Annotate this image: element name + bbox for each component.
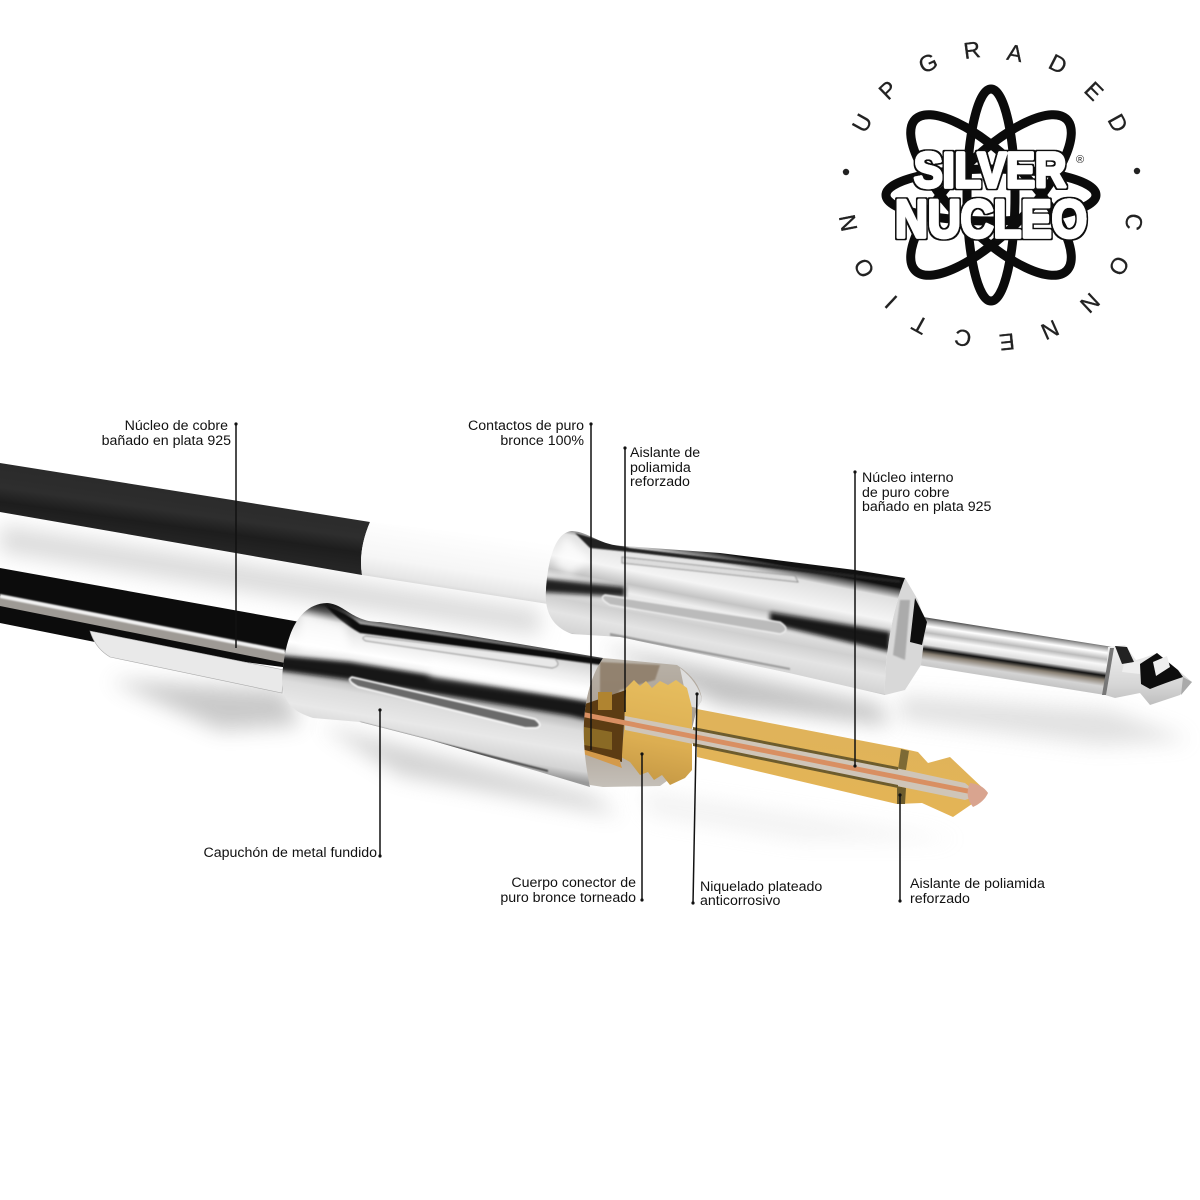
callout: Aislante de poliamida (bottom): reforzado — [910, 891, 970, 907]
ring lettering: G — [914, 47, 942, 79]
collar — [885, 578, 926, 695]
callout: Aislante de poliamida (top): Aislante de — [630, 445, 700, 461]
callout: Núcleo de cobre: bañado en plata 925 — [102, 433, 231, 449]
shaft — [918, 617, 1113, 695]
callout: Núcleo interno: de puro cobre — [862, 485, 950, 501]
callout: Núcleo interno: Núcleo interno — [862, 470, 954, 486]
callout: Aislante de poliamida (bottom) — [898, 793, 1045, 907]
callout: Contactos de puro bronce: Contactos de puro — [468, 418, 584, 434]
ring lettering — [834, 36, 1148, 356]
logo: Silver Nucleo: ® — [1076, 154, 1084, 166]
ring lettering: E — [998, 328, 1016, 356]
ring lettering: N — [1037, 315, 1063, 345]
slots — [363, 636, 558, 668]
ring lettering: A — [1005, 39, 1025, 67]
callout: Aislante de poliamida (top): poliamida — [630, 460, 691, 476]
ring lettering: E — [1079, 76, 1109, 106]
callout: Capuchón de metal fundido — [203, 708, 382, 861]
callout: Aislante de poliamida (top) — [623, 445, 700, 712]
gold plug cross-section — [578, 658, 988, 817]
plug tip — [1102, 645, 1192, 705]
atom orbits — [886, 89, 1096, 301]
white cable sleeve — [361, 522, 560, 604]
callout: Contactos de puro bronce: bronce 100% — [500, 433, 584, 449]
ring lettering: N — [1075, 288, 1105, 318]
lower metal connector — [275, 603, 610, 787]
gold body — [621, 680, 692, 785]
callout: Aislante de poliamida (top): reforzado — [630, 474, 690, 490]
callout: Cuerpo conector: Cuerpo conector de — [511, 875, 636, 891]
center conductor — [625, 716, 693, 744]
ring lettering: U — [847, 109, 877, 137]
ring lettering: O — [848, 254, 880, 282]
background shadows — [0, 525, 1190, 840]
groove bands — [898, 749, 909, 770]
white insulation strip — [90, 631, 284, 693]
ring lettering: C — [952, 324, 974, 352]
callout: Núcleo de cobre: Núcleo de cobre — [125, 418, 228, 434]
silver conductor — [0, 596, 285, 663]
upper metal connector — [540, 531, 1192, 705]
wordmark: SILVER — [914, 144, 1066, 198]
ring lettering: D — [1045, 49, 1071, 79]
ring lettering: C — [1120, 212, 1148, 232]
callout: Niquelado plateado — [691, 692, 822, 909]
slots — [622, 557, 798, 582]
callout: Aislante de poliamida (bottom): Aislante de poliamida — [910, 876, 1045, 892]
ring lettering: N — [834, 212, 862, 234]
ring lettering: T — [908, 310, 932, 340]
lower cable — [0, 568, 300, 693]
ring lettering: I — [880, 290, 902, 314]
callout: Núcleo interno: bañado en plata 925 — [862, 499, 991, 515]
logo: Silver Nucleo: NUCLEO — [895, 190, 1087, 249]
callout: Capuchón de metal fundido: Capuchón de metal fundido — [203, 845, 377, 861]
callout: Niquelado plateado: Niquelado plateado — [700, 879, 822, 895]
callout: Cuerpo conector — [500, 752, 644, 906]
ring lettering: D — [1103, 109, 1133, 137]
ring lettering: P — [873, 75, 903, 105]
blade — [697, 709, 988, 817]
barrel — [546, 531, 905, 695]
callout: Cuerpo conector: puro bronce torneado — [500, 890, 636, 906]
callout: Niquelado plateado: anticorrosivo — [700, 893, 781, 909]
callout: Núcleo de cobre — [102, 418, 238, 648]
logo: Silver Nucleo — [834, 36, 1148, 356]
ring lettering: R — [962, 36, 982, 64]
upper cable — [0, 463, 560, 604]
callout: Núcleo interno — [853, 470, 991, 768]
shell — [578, 658, 702, 787]
inner chamber — [578, 690, 626, 762]
callout: Contactos de puro bronce — [468, 418, 593, 750]
ring lettering: O — [1103, 252, 1135, 280]
